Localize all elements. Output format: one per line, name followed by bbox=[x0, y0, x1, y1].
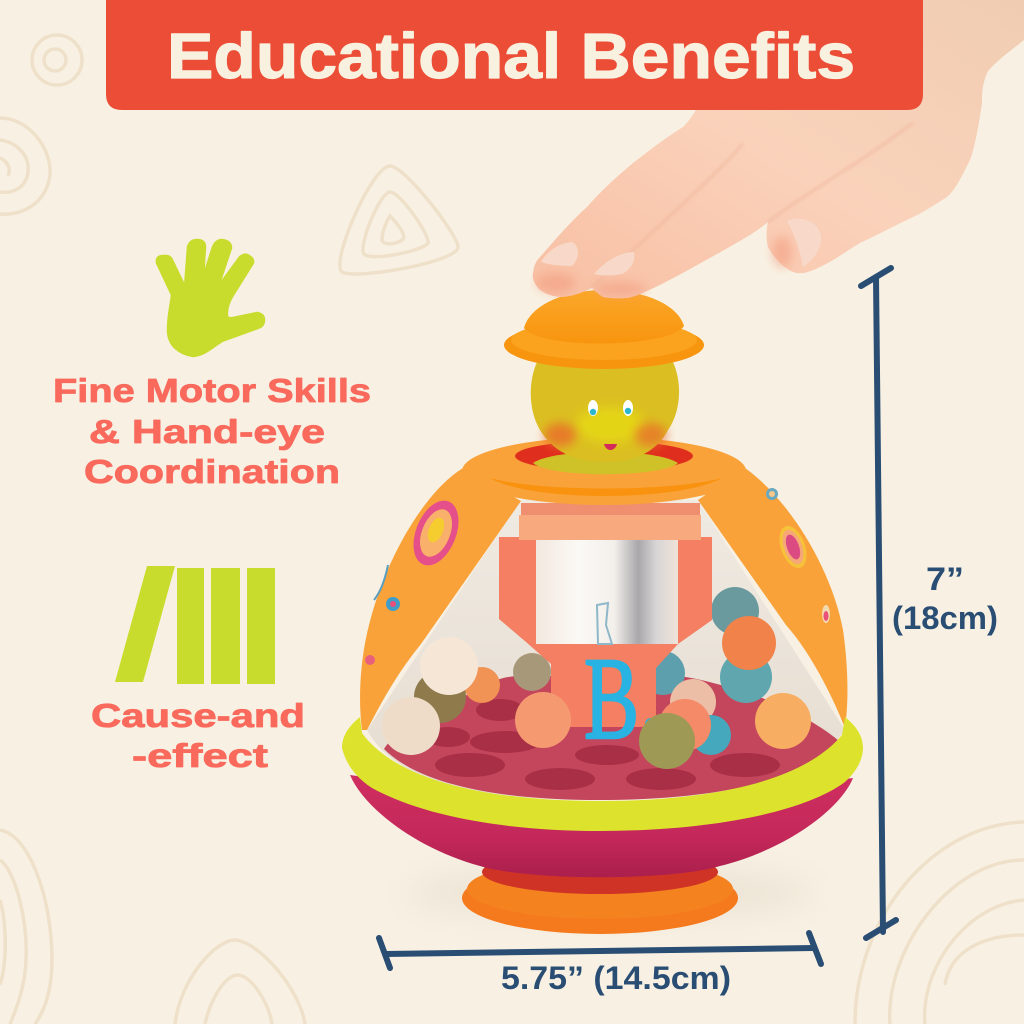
height dimension bbox=[861, 268, 896, 938]
toy base bbox=[462, 850, 738, 934]
icon: green hand bbox=[157, 240, 264, 356]
height label: 7” bbox=[926, 561, 964, 597]
height label: (18cm) bbox=[892, 600, 998, 636]
back balls bbox=[464, 587, 759, 703]
magenta body bbox=[350, 775, 853, 877]
height label bbox=[892, 561, 998, 636]
width dimension bbox=[379, 933, 821, 968]
floor shadow bbox=[405, 869, 815, 917]
toy: spinning top bbox=[342, 290, 863, 934]
B logo: B bbox=[584, 634, 639, 765]
hand photo bbox=[533, 0, 1024, 298]
orange panel right bbox=[698, 468, 847, 728]
orange panel left bbox=[360, 468, 521, 730]
width label: 5.75” (14.5cm) bbox=[501, 960, 731, 996]
yellow rim bbox=[342, 717, 863, 831]
text: fine motor skills bbox=[53, 372, 371, 490]
front balls bbox=[382, 616, 811, 769]
icon: green books bbox=[115, 566, 275, 684]
text: fine motor skills: Fine Motor Skills bbox=[53, 372, 371, 409]
hat bbox=[504, 290, 704, 369]
text: fine motor skills: & Hand-eye bbox=[89, 413, 325, 450]
red tray bbox=[384, 676, 840, 800]
text: fine motor skills: Coordination bbox=[84, 453, 340, 490]
clear dome bbox=[367, 500, 845, 800]
text: cause and effect: Cause-and bbox=[91, 697, 305, 734]
text: cause and effect: -effect bbox=[132, 737, 268, 774]
head bbox=[531, 360, 679, 462]
title: Educational Benefits bbox=[167, 20, 855, 92]
fingertip shading bbox=[536, 236, 792, 296]
centre column bbox=[499, 503, 712, 727]
nails bbox=[541, 219, 821, 276]
title banner bbox=[106, 0, 923, 110]
collar bbox=[462, 437, 746, 505]
text: cause and effect bbox=[91, 697, 305, 774]
